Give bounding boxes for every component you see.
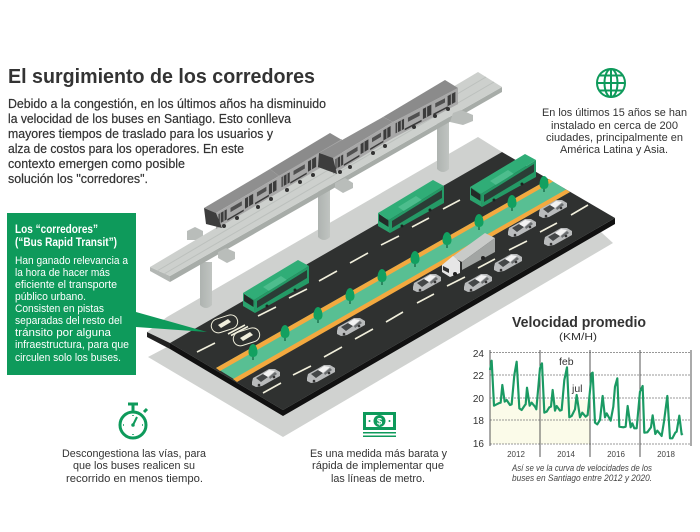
callout body [15, 255, 129, 364]
chart heading: Velocidad promedio [512, 315, 646, 331]
truck [442, 233, 495, 277]
callout heading: (“Bus Rapid Transit”) [15, 237, 117, 249]
callout heading: Los “corredores” [15, 224, 98, 236]
callout body: eficiente el transporte [15, 279, 117, 291]
callout body: circulen solo los buses. [15, 352, 121, 364]
text: global adoption: ciudades, principalmente en [546, 132, 683, 144]
callout body: infraestructura, para que [15, 339, 129, 351]
car 4 [383, 80, 458, 138]
line chart: velocidad promedio: 2012 [507, 450, 525, 459]
icon: banknote [363, 412, 396, 437]
lower sidewalk [148, 222, 613, 437]
intro text [8, 97, 326, 186]
text: global adoption: América Latina y Asia. [560, 144, 668, 156]
text: cost benefit: Es una medida más barata y [310, 448, 448, 460]
intro text: solución los "corredores". [8, 172, 148, 186]
front beam caps [218, 110, 473, 263]
text: global adoption: En los últimos 15 años se han [542, 107, 687, 119]
text: global adoption: instalado en cerca de 200 [551, 120, 678, 132]
callout body: tránsito por alguna [15, 327, 112, 339]
bus lane road markings [209, 313, 261, 348]
text: cost benefit: rápida de implementar que [312, 460, 444, 472]
elevated beam [150, 72, 502, 282]
bus lane with orange borders [216, 179, 570, 382]
intro text: mayores tiempos de traslado para los usuarios y [8, 127, 274, 141]
line chart: velocidad promedio: feb [559, 356, 574, 368]
callout body: público urbano. [15, 291, 86, 303]
panel: corredores callout [7, 213, 207, 375]
line chart: velocidad promedio: 22 [473, 371, 484, 382]
lane dashes [197, 200, 588, 393]
line chart: velocidad promedio: 2018 [657, 450, 675, 459]
chart heading: (KM/H) [559, 331, 597, 343]
chart caption [511, 463, 652, 483]
line chart: velocidad promedio: 18 [473, 416, 484, 427]
text: stopwatch benefit: Descongestiona las vías, para [62, 448, 206, 460]
callout box [7, 213, 136, 375]
text: cost benefit [310, 448, 448, 485]
road surface [170, 152, 615, 416]
line chart: velocidad promedio [473, 349, 691, 459]
buses [243, 154, 536, 313]
trees [248, 176, 548, 360]
text: stopwatch benefit: que los buses realicen su [73, 460, 195, 472]
text: global adoption [542, 107, 687, 156]
line chart: velocidad promedio: 20 [473, 394, 484, 405]
intro text: la velocidad de los buses en Santiago. Esto conlleva [8, 112, 291, 126]
callout heading [15, 224, 117, 249]
line chart: velocidad promedio: 2016 [607, 450, 625, 459]
line chart: velocidad promedio: 2014 [557, 450, 575, 459]
icon: banknote: $ [377, 416, 383, 428]
callout body: la hora de hacer más [15, 267, 110, 279]
text: stopwatch benefit: recorrido en menos tiempo. [66, 473, 203, 485]
car 3 [318, 117, 393, 174]
intro text: alza de costos para los operadores. En este [8, 142, 244, 156]
callout body: Han ganado relevancia a [15, 255, 129, 267]
car 2 [270, 133, 342, 192]
callout pointer [136, 312, 207, 332]
title: El surgimiento de los corredores [8, 66, 315, 88]
icon: stopwatch [120, 404, 147, 438]
line chart: velocidad promedio: 24 [473, 349, 484, 360]
line chart: velocidad promedio: 16 [473, 439, 484, 450]
line chart: velocidad promedio: jul [571, 383, 583, 395]
intro text: Debido a la congestión, en los últimos años ha disminuido [8, 97, 326, 111]
car 1 [204, 169, 279, 229]
text: cost benefit: las líneas de metro. [331, 473, 425, 485]
rear beam caps [187, 227, 203, 240]
intro text: contexto emergen como posible [8, 157, 185, 171]
columns [200, 115, 449, 308]
metro train [204, 80, 458, 229]
callout body: separadas del resto del [15, 315, 122, 327]
upper sidewalk [147, 137, 502, 349]
text: stopwatch benefit [62, 448, 206, 485]
chart caption: buses en Santiago entre 2012 y 2020. [512, 473, 652, 483]
callout body: Consisten en pistas [15, 303, 104, 315]
chart heading [512, 315, 646, 343]
cars [252, 200, 572, 387]
icon: globe [597, 69, 625, 97]
illustration: road corridor and elevated metro [147, 72, 615, 437]
chart caption: Así se ve la curva de velocidades de los [511, 463, 652, 473]
